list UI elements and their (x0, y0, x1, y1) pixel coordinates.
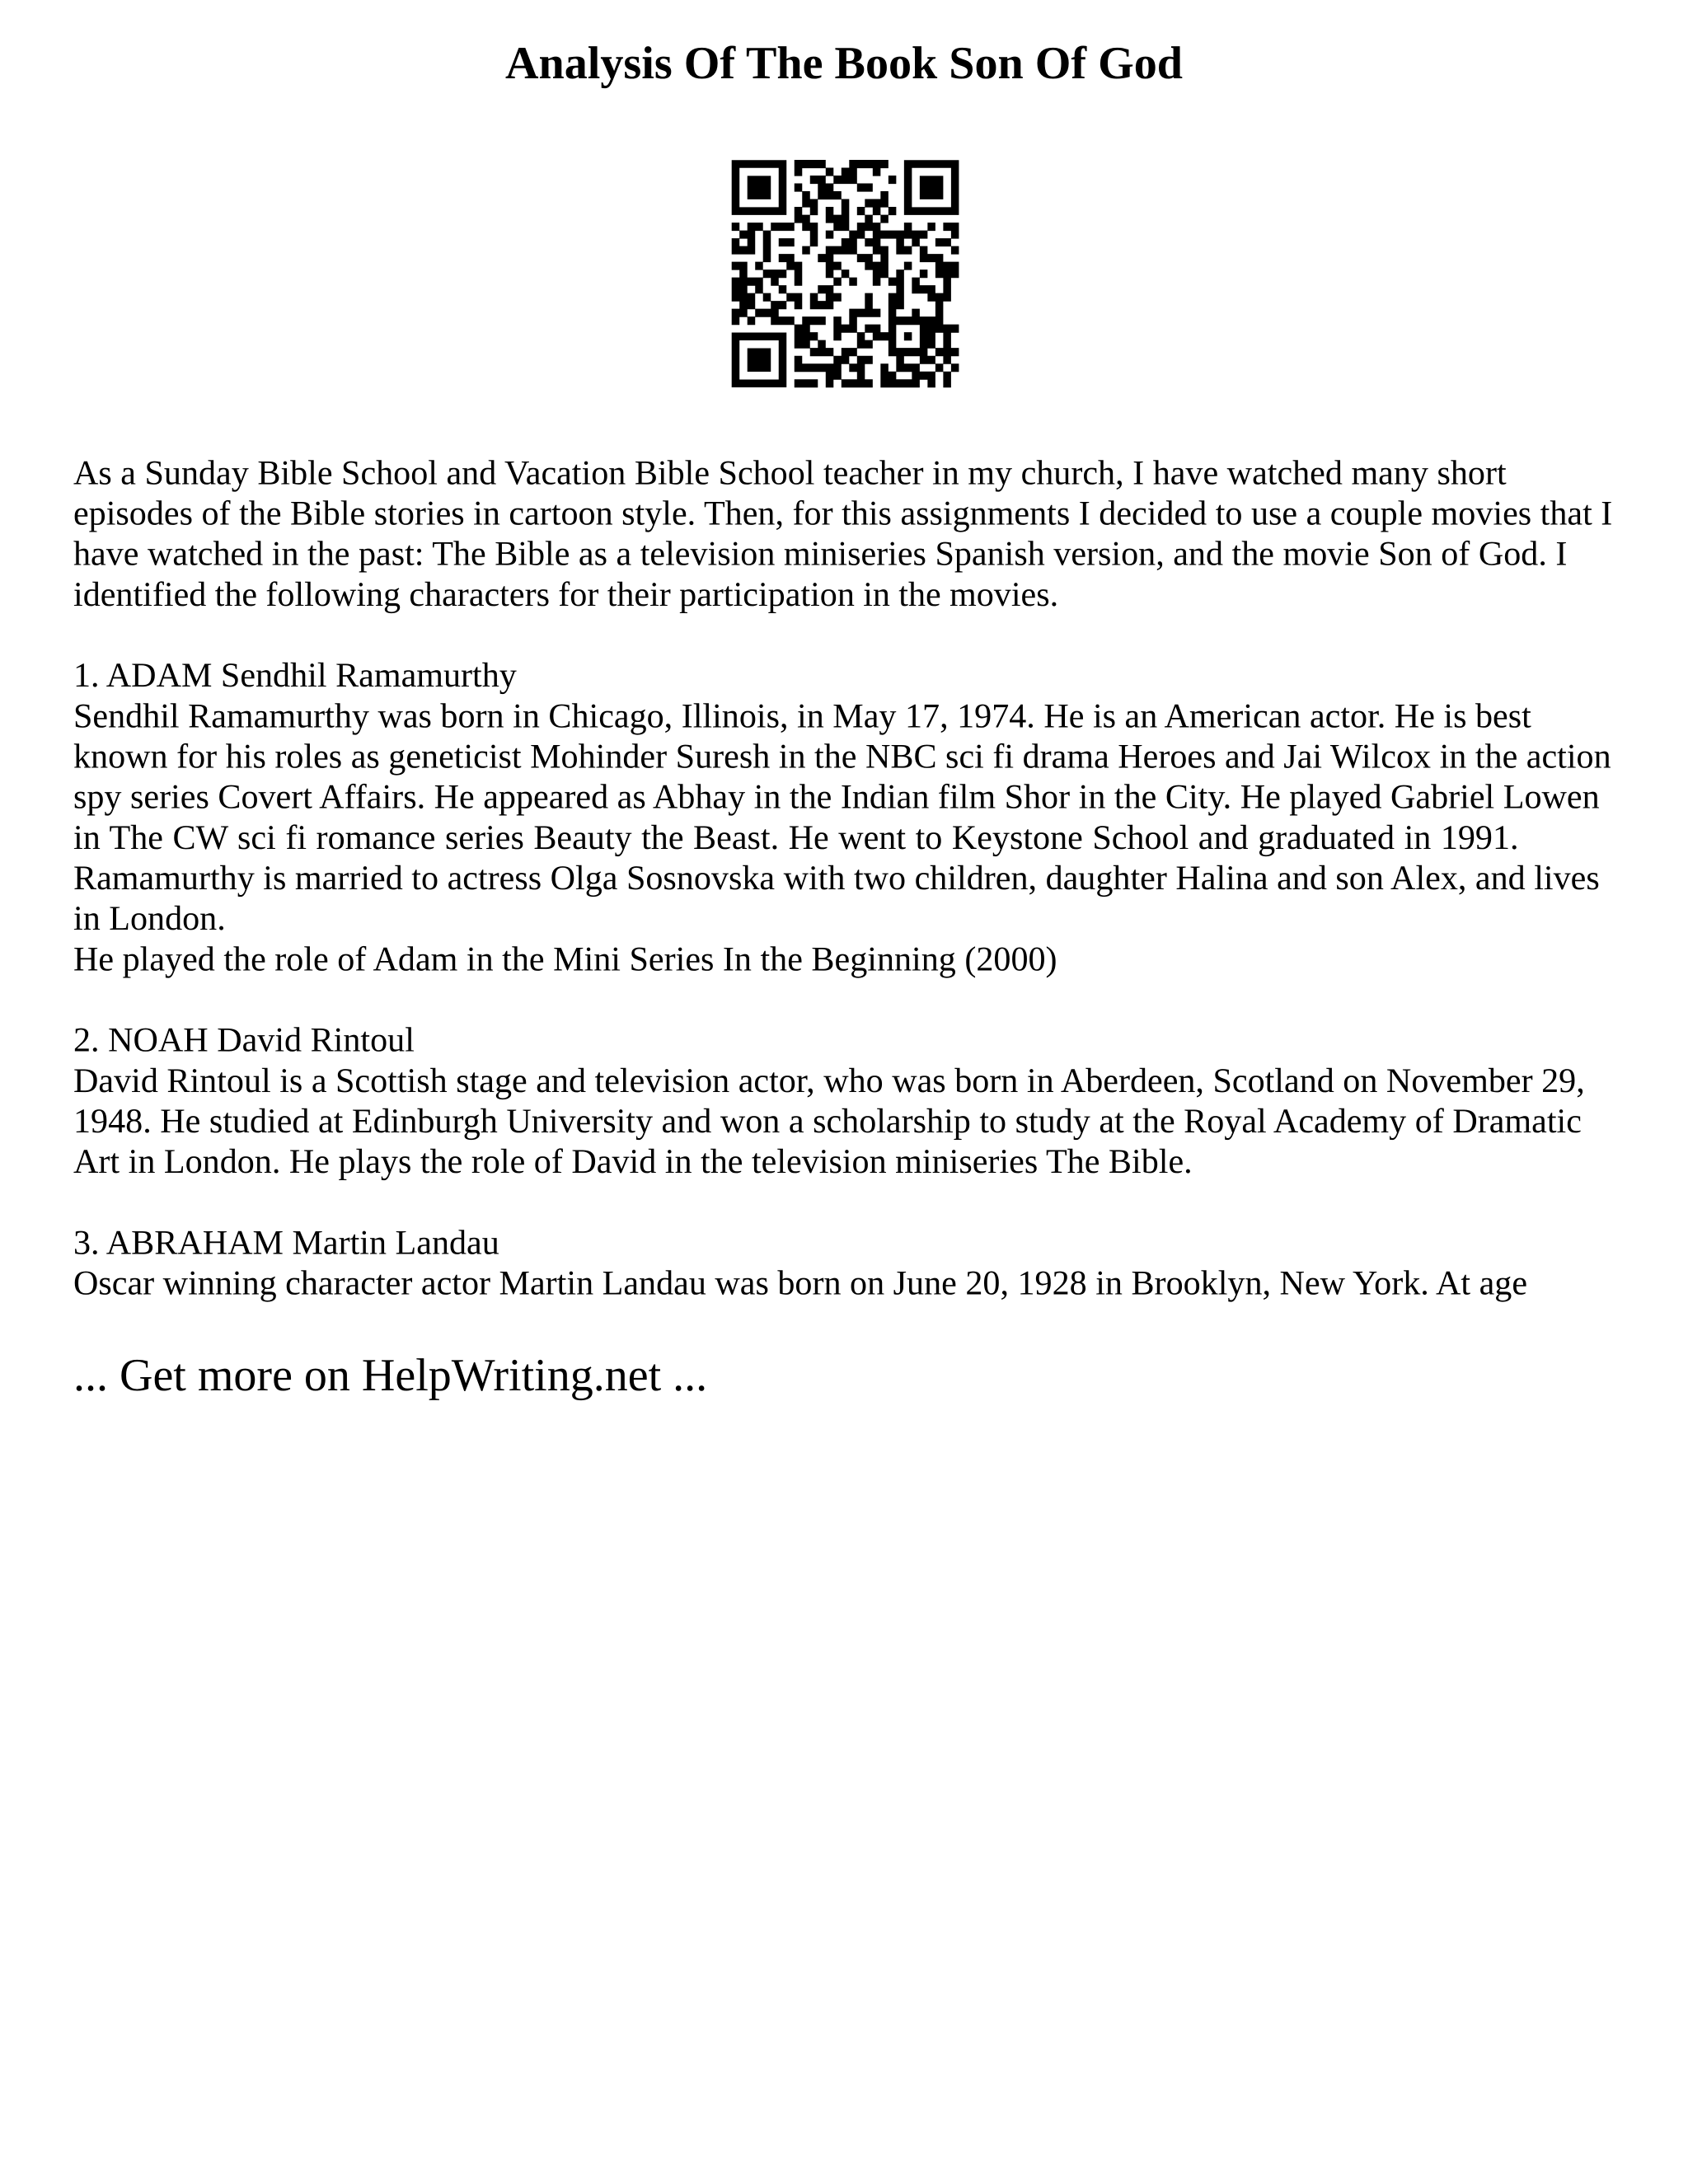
section 1: Adam: in The CW sci fi romance series Beauty the Beast. He went to Keystone School and graduated in 1991. (73, 818, 1519, 857)
section 3: Abraham: Oscar winning character actor Martin Landau was born on June 20, 1928 in Brooklyn, New York. At age (73, 1264, 1527, 1303)
intro paragraph (73, 453, 1612, 614)
section 2: Noah (73, 1021, 1585, 1181)
section 1: Adam: spy series Covert Affairs. He appeared as Abhay in the Indian film Shor in the City. He played Gabriel Lowen (73, 778, 1600, 817)
section 2: Noah: Art in London. He plays the role of David in the television miniseries The Bible. (73, 1142, 1193, 1181)
section 1: Adam: in London. (73, 899, 226, 938)
title: Analysis Of The Book Son Of God (505, 38, 1183, 89)
section 1: Adam: Ramamurthy is married to actress Olga Sosnovska with two children, daughter Halina and son Alex, and lives (73, 859, 1600, 898)
intro paragraph: episodes of the Bible stories in cartoon style. Then, for this assignments I decided to use a couple movies that I (73, 494, 1612, 532)
section 1: Adam: Sendhil Ramamurthy was born in Chicago, Illinois, in May 17, 1974. He is an American actor. He is best (73, 696, 1531, 735)
intro paragraph: As a Sunday Bible School and Vacation Bible School teacher in my church, I have watched many short (73, 453, 1507, 492)
section 1: Adam: known for his roles as geneticist Mohinder Suresh in the NBC sci fi drama Heroes and Jai Wilcox in the action (73, 737, 1611, 776)
section 3: Abraham: 3. ABRAHAM Martin Landau (73, 1224, 499, 1263)
intro paragraph: have watched in the past: The Bible as a television miniseries Spanish version, and the movie Son of God. I (73, 535, 1567, 574)
section 2: Noah: David Rintoul is a Scottish stage and television actor, who was born in Aberdeen, Scotland on November 29, (73, 1062, 1585, 1100)
section 1: Adam (73, 656, 1611, 978)
intro paragraph: identified the following characters for their participation in the movies. (73, 575, 1058, 614)
section 1: Adam: He played the role of Adam in the Mini Series In the Beginning (2000) (73, 940, 1057, 978)
section 2: Noah: 2. NOAH David Rintoul (73, 1021, 415, 1060)
section 3: Abraham (73, 1224, 1527, 1303)
call to action: ... Get more on HelpWriting.net ... (73, 1350, 707, 1401)
QR code (732, 160, 959, 387)
section 1: Adam: 1. ADAM Sendhil Ramamurthy (73, 656, 517, 695)
section 2: Noah: 1948. He studied at Edinburgh University and won a scholarship to study at the Royal Academy of Dramatic (73, 1102, 1582, 1141)
